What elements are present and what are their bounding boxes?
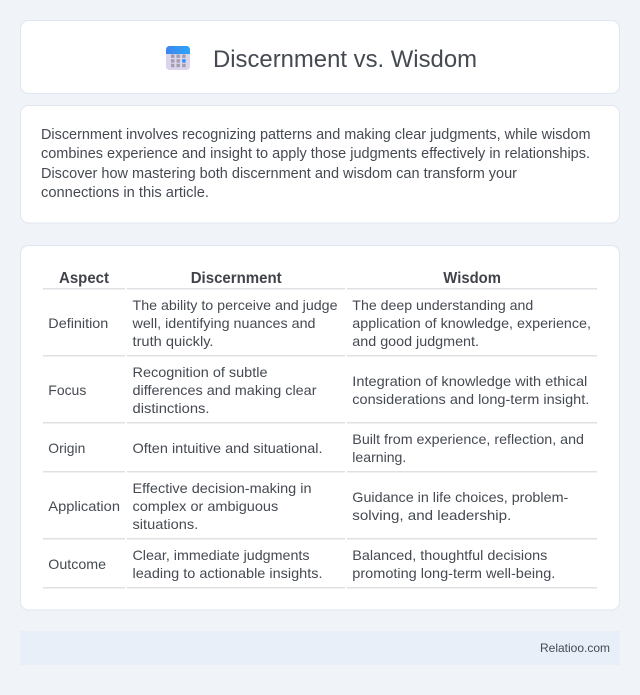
table row: Definition: The ability to perceive and judge	[132, 297, 338, 313]
table row: Outcome: promoting long-term well-being.	[352, 565, 555, 581]
table row: Definition: The deep understanding and	[352, 297, 533, 313]
table row: Application: Guidance in life choices, problem-	[352, 489, 569, 505]
text block: introduction: combines experience and insight to apply those judgments effectively in relationships.	[41, 146, 590, 162]
table row: Definition: application of knowledge, experience,	[352, 315, 591, 331]
table row: Definition: truth quickly.	[132, 333, 214, 349]
table row: Application: Application	[48, 498, 120, 514]
text block: introduction: Discernment involves recognizing patterns and making clear judgments, while wisdom	[41, 127, 591, 143]
icon: calendar	[166, 46, 190, 70]
table header row: Wisdom	[443, 270, 501, 287]
text block: introduction: connections in this article.	[41, 185, 209, 201]
table row: Origin: Built from experience, reflection, and	[352, 431, 584, 447]
text block: introduction: Discover how mastering both discernment and wisdom can transform your	[41, 166, 517, 182]
panel: introduction	[20, 106, 620, 223]
text block: introduction	[41, 127, 591, 201]
table row: Origin: Often intuitive and situational.	[132, 440, 322, 456]
panel: comparison table	[20, 246, 620, 610]
panel: title header	[20, 20, 620, 94]
table row: Definition	[43, 297, 597, 356]
table header row: Discernment	[191, 270, 282, 287]
table row: Outcome: Balanced, thoughtful decisions	[352, 547, 547, 563]
table row: Focus: Focus	[48, 382, 86, 398]
table row: Application: complex or ambiguous	[132, 498, 278, 514]
table row: Definition: and good judgment.	[352, 333, 479, 349]
table row: Outcome: leading to actionable insights.	[132, 565, 322, 581]
table row: Application: Effective decision-making in	[132, 480, 312, 496]
table row: Focus	[43, 364, 597, 424]
table row: Application: situations.	[132, 516, 198, 532]
footer text: Relatioo.com	[540, 641, 610, 655]
table row: Origin	[43, 431, 597, 472]
table header row	[43, 270, 597, 290]
table row: Outcome: Clear, immediate judgments	[132, 547, 310, 563]
table row: Focus: distinctions.	[132, 400, 210, 416]
table row: Application	[43, 480, 597, 540]
table header row: Aspect	[59, 270, 109, 287]
footer bar	[20, 631, 620, 665]
table row: Focus: considerations and long-term insight.	[352, 391, 589, 407]
title: Discernment vs. Wisdom	[213, 46, 477, 73]
table row: Origin: Origin	[48, 440, 85, 456]
table row: Application: solving, and leadership.	[352, 507, 511, 523]
table row: Outcome: Outcome	[48, 556, 106, 572]
table row: Origin: learning.	[352, 449, 406, 465]
table row: Definition: well, identifying nuances and	[131, 315, 316, 331]
table row: Definition: Definition	[48, 315, 108, 331]
table row: Focus: Recognition of subtle	[132, 364, 268, 380]
table row: Focus: differences and making clear	[132, 382, 317, 398]
table row: Focus: Integration of knowledge with ethical	[352, 373, 587, 389]
table row: Outcome	[43, 547, 597, 588]
